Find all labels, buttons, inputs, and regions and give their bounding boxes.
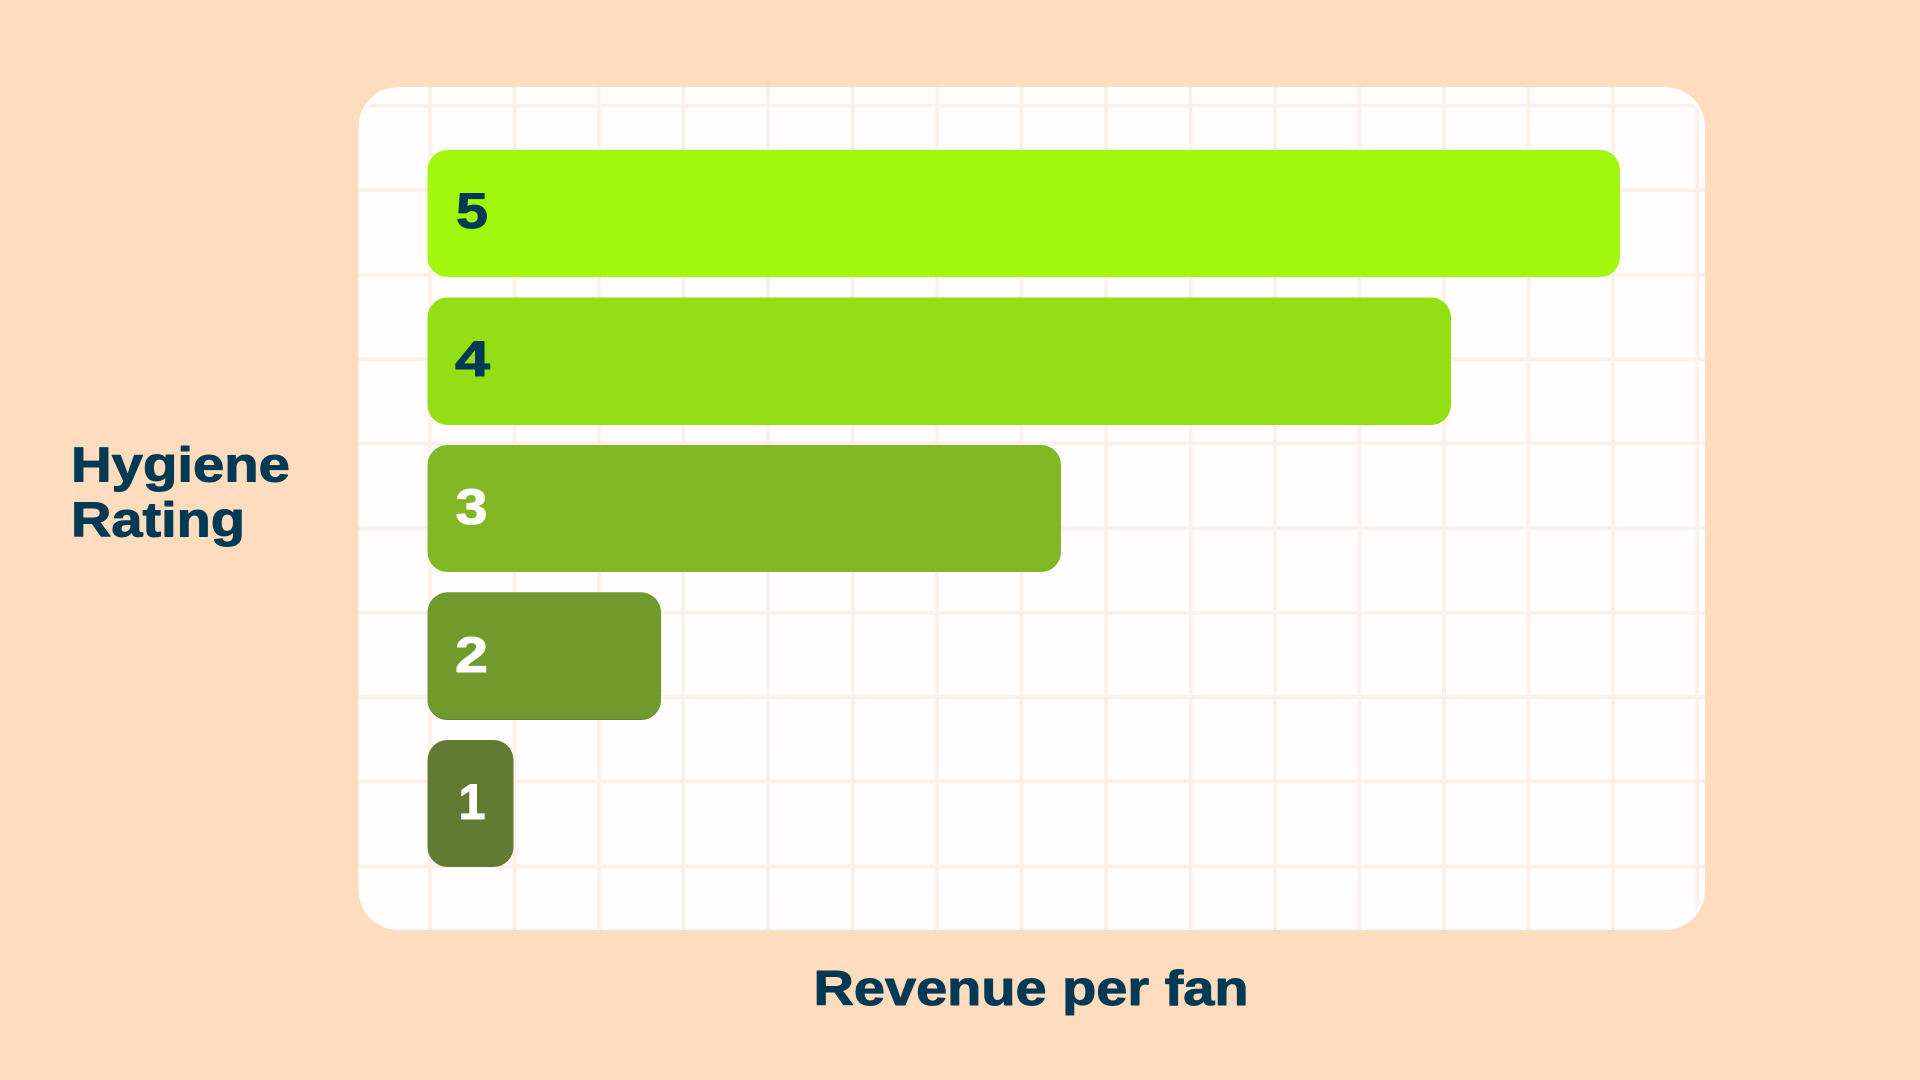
bar: hygiene rating 3: 3 bbox=[456, 479, 488, 535]
bar: hygiene rating 1: 1 bbox=[458, 774, 486, 830]
bar: hygiene rating 4 bbox=[428, 298, 1451, 425]
bar: hygiene rating 1 bbox=[428, 740, 514, 867]
x-axis label: Revenue per fan: Revenue per fan bbox=[814, 962, 1248, 1016]
bar: hygiene rating 5 bbox=[428, 150, 1620, 277]
bar: hygiene rating 2 bbox=[428, 592, 661, 720]
y-axis label: Hygiene Rating bbox=[71, 439, 290, 548]
bar: hygiene rating 4: 4 bbox=[455, 331, 490, 387]
bar: hygiene rating 5: 5 bbox=[456, 183, 488, 239]
bar: hygiene rating 3 bbox=[428, 445, 1061, 572]
panel: chart area bbox=[358, 87, 1705, 930]
y-axis label: Hygiene Rating: Hygiene bbox=[71, 439, 290, 493]
y-axis label: Hygiene Rating: Rating bbox=[71, 494, 245, 548]
bar: hygiene rating 2: 2 bbox=[455, 627, 488, 683]
infographic canvas bbox=[74, 87, 1705, 1016]
